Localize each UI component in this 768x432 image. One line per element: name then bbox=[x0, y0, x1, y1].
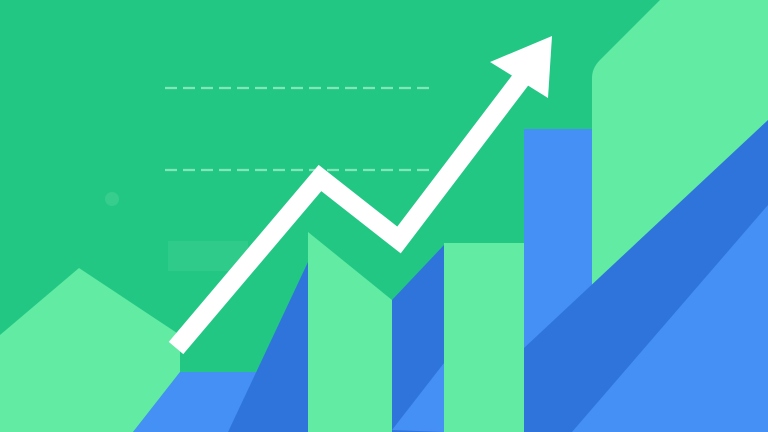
faint label block bbox=[168, 241, 248, 271]
light blue lower right bbox=[572, 205, 768, 432]
dark blue column bbox=[392, 245, 444, 432]
dark blue triangle bbox=[228, 262, 308, 432]
light blue wedge bbox=[392, 363, 444, 432]
light blue base left bbox=[133, 372, 260, 432]
growth arrow bbox=[176, 36, 552, 348]
mountain: left bbox=[0, 268, 180, 432]
right big green panel bbox=[592, 0, 768, 432]
dashed gridlines bbox=[165, 88, 432, 170]
bar 2 bbox=[444, 243, 524, 432]
bar 3 bbox=[524, 129, 592, 432]
bar 1 bbox=[308, 232, 392, 432]
faint dot bbox=[105, 192, 119, 206]
dark blue diagonal band bbox=[524, 120, 768, 432]
